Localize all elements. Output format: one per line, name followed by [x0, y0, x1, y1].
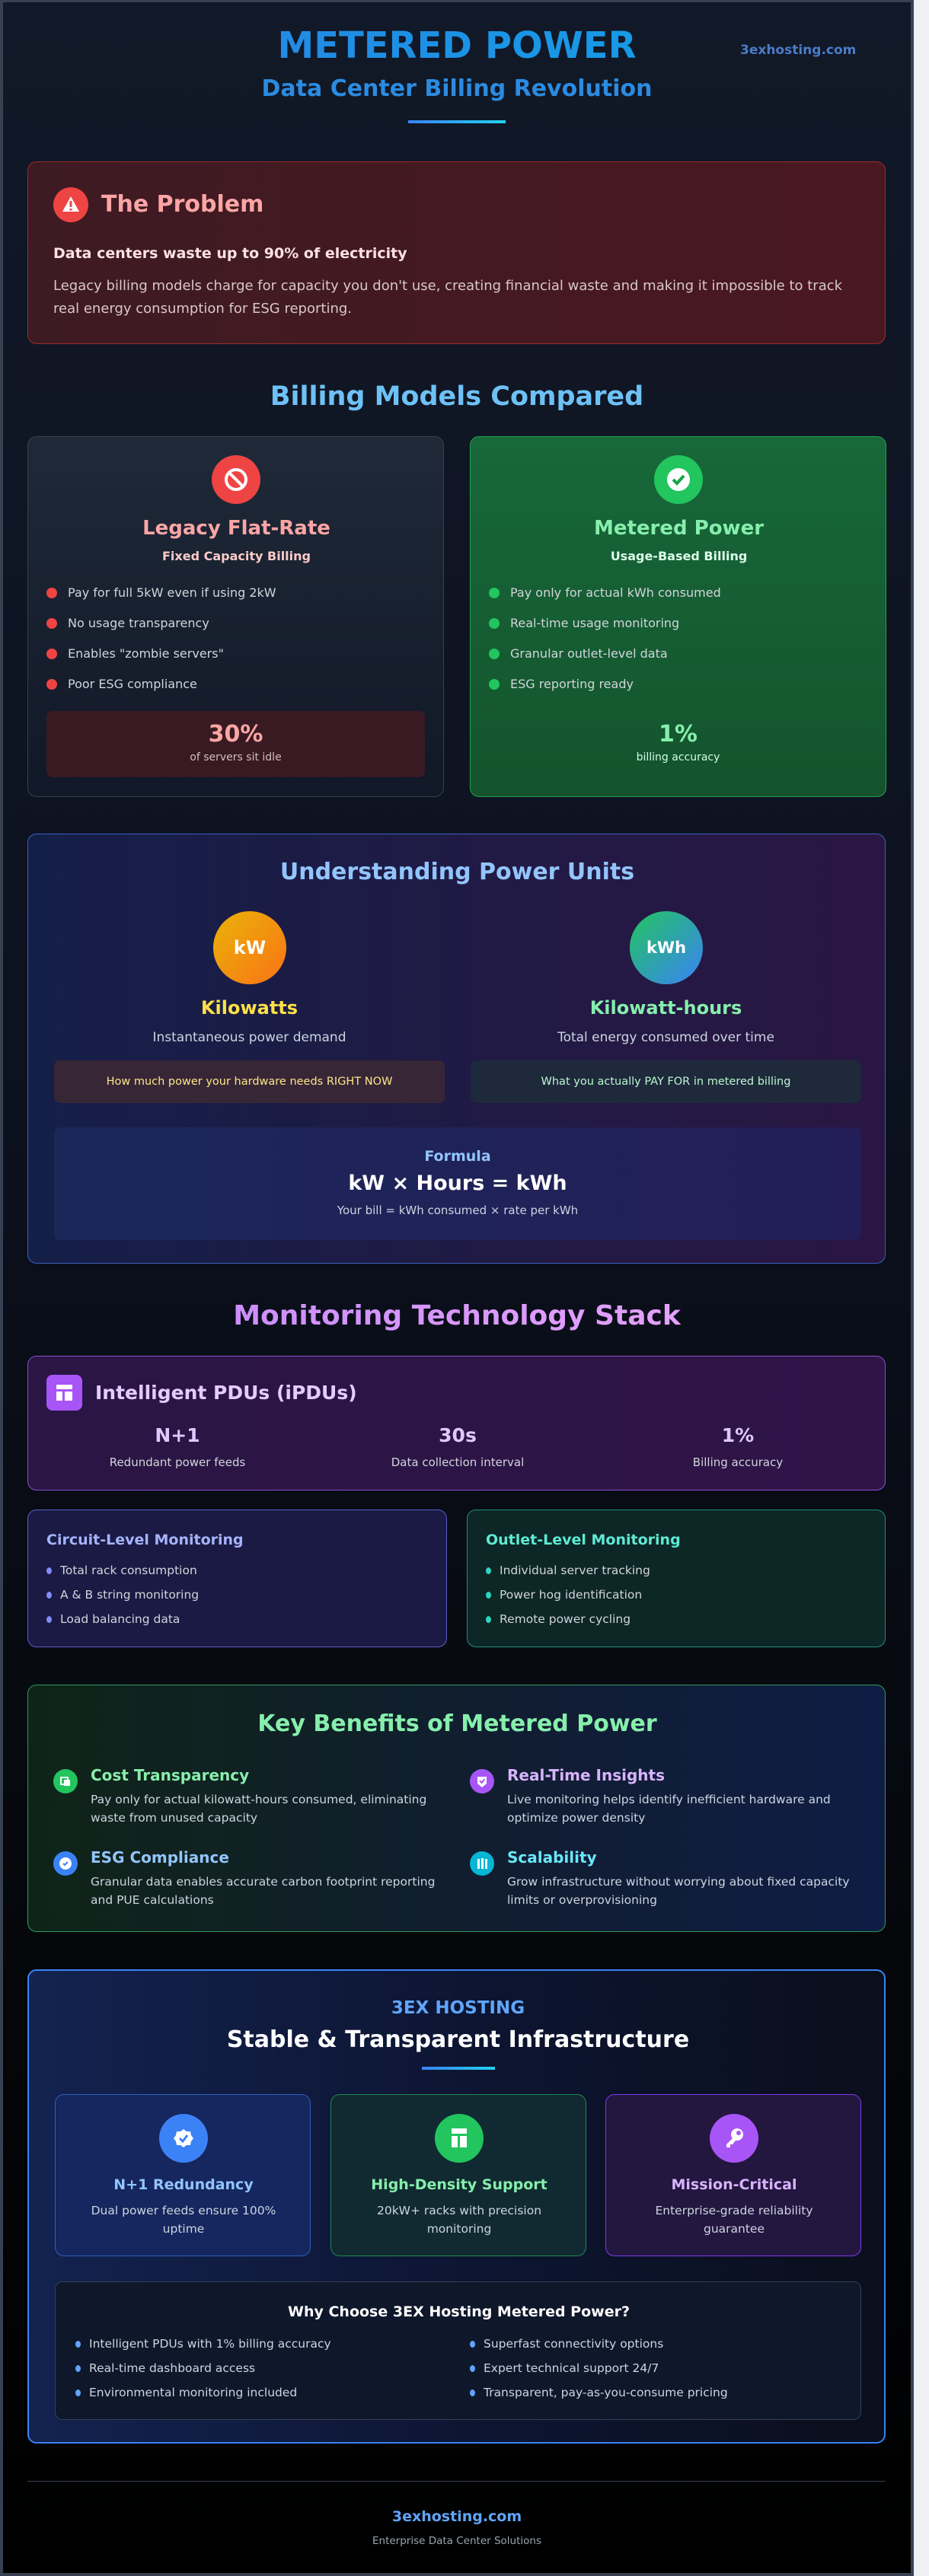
callout: kW — [54, 1060, 445, 1103]
why choose box — [55, 2281, 861, 2420]
card: high-density support: 20kW+ racks with precision monitoring — [377, 2204, 541, 2236]
panel: key benefits — [27, 1685, 886, 1932]
bullet list: Pay only for actual kWh consumed — [510, 585, 721, 600]
callout: kWh: What you actually PAY FOR in metered billing — [541, 1076, 790, 1088]
title: METERED POWER — [277, 24, 637, 67]
footer: 3exhosting.com — [392, 2508, 522, 2525]
benefit: cost transparency — [53, 1766, 426, 1825]
benefit: ESG compliance: Granular data enables accurate carbon footprint reporting and PUE calculations — [91, 1875, 435, 1907]
icon: kWh — [630, 911, 703, 984]
icon: kW: kW — [234, 937, 266, 958]
card: high-density support: High-Density Support — [371, 2176, 548, 2193]
bullet list — [46, 1564, 199, 1626]
stat: 30% — [46, 711, 425, 777]
list: left: Intelligent PDUs with 1% billing accuracy — [89, 2337, 331, 2351]
key stat: Data centers waste up to 90% of electricity — [53, 245, 407, 262]
list: right: Superfast connectivity options — [484, 2337, 663, 2351]
benefit: ESG compliance: ESG Compliance — [91, 1848, 229, 1867]
stat: 30%: 30% — [209, 721, 263, 748]
icon: kWh: kWh — [646, 939, 686, 957]
icon: kW — [213, 911, 286, 984]
bullet list: ESG reporting ready — [510, 677, 634, 691]
stat: N+1: N+1 — [155, 1424, 200, 1446]
formula box: Your bill = kWh consumed × rate per kWh — [337, 1204, 578, 1217]
kilowatts title: Kilowatts — [201, 997, 298, 1019]
panel: outlet-level monitoring: Outlet-Level Monitoring — [486, 1532, 681, 1548]
title underline — [408, 120, 506, 123]
why choose box: Why Choose 3EX Hosting Metered Power? — [288, 2303, 630, 2320]
bullet list: Power hog identification — [500, 1588, 642, 1602]
panel: the problem — [27, 161, 886, 344]
bullet list: A & B string monitoring — [60, 1588, 199, 1602]
icon: warning — [53, 187, 88, 222]
benefit: ESG compliance — [53, 1848, 435, 1907]
panel: circuit-level monitoring: Circuit-Level Monitoring — [46, 1532, 244, 1548]
stat: 30%: of servers sit idle — [190, 751, 282, 764]
formula box: kW × Hours = kWh — [348, 1172, 567, 1195]
panel: intelligent PDUs — [27, 1356, 886, 1490]
card: mission-critical: Mission-Critical — [671, 2176, 797, 2193]
bullet list: Load balancing data — [60, 1612, 180, 1626]
list: right: Expert technical support 24/7 — [484, 2361, 659, 2375]
benefit: scalability: Grow infrastructure without worrying about fixed capacity limits or overprovisioning — [507, 1875, 850, 1907]
panel: outlet-level monitoring — [467, 1510, 886, 1647]
stat: 1%: Billing accuracy — [693, 1455, 783, 1469]
heading: Understanding Power Units — [280, 859, 634, 885]
bullet list: No usage transparency — [68, 616, 209, 630]
kilowatt-hours title: Kilowatt-hours — [590, 997, 742, 1019]
formula box: Formula — [424, 1148, 491, 1165]
benefit: cost transparency: Cost Transparency — [91, 1766, 249, 1784]
benefit: real-time insights: Live monitoring helps identify inefficient hardware and optimize power density — [507, 1793, 831, 1825]
heading: Stable & Transparent Infrastructure — [227, 2026, 689, 2053]
bullet list: Remote power cycling — [500, 1612, 631, 1626]
benefit: cost transparency: Pay only for actual kilowatt-hours consumed, eliminating waste from unused capacity — [91, 1793, 426, 1825]
icon: check — [654, 455, 703, 504]
card: N+1 redundancy: N+1 Redundancy — [113, 2176, 254, 2193]
panel: power units: Instantaneous power demand — [152, 1030, 346, 1045]
card: N+1 redundancy: Dual power feeds ensure 100% uptime — [91, 2204, 276, 2236]
description: Legacy billing models charge for capacity you don't use, creating financial waste and making it impossible to track real energy consumption for ESG reporting. — [53, 278, 842, 317]
panel: metered power — [470, 436, 886, 797]
footer — [372, 2508, 541, 2547]
list: right: Transparent, pay-as-you-consume pricing — [484, 2386, 728, 2399]
heading: monitoring stack: Monitoring Technology Stack — [233, 1300, 681, 1331]
card: N+1 redundancy — [55, 2094, 311, 2256]
list: left — [75, 2337, 331, 2399]
benefit: real-time insights — [470, 1766, 831, 1825]
formula box — [54, 1127, 861, 1240]
panel title: Intelligent PDUs (iPDUs) — [95, 1382, 357, 1404]
panel: metered power: Usage-Based Billing — [611, 549, 747, 563]
stat: 1% — [637, 721, 720, 764]
icon: PDU — [46, 1375, 82, 1411]
card: mission-critical — [605, 2094, 861, 2256]
bullet list: Real-time usage monitoring — [510, 616, 679, 630]
stat: 1%: 1% — [659, 721, 698, 748]
stat: N+1 — [110, 1424, 245, 1469]
footer: Enterprise Data Center Solutions — [372, 2535, 541, 2547]
stat: 30s — [391, 1424, 524, 1469]
bullet list — [489, 585, 721, 691]
card title: Metered Power — [594, 517, 764, 540]
bullet list: Poor ESG compliance — [68, 677, 197, 691]
brand top right: 3exhosting.com — [740, 43, 856, 58]
title — [0, 23, 914, 69]
panel: legacy flat-rate: Fixed Capacity Billing — [162, 549, 311, 563]
stat: 1% — [693, 1424, 783, 1469]
panel: power units: Total energy consumed over time — [557, 1030, 774, 1045]
heading: monitoring stack — [0, 1299, 914, 1334]
benefit: real-time insights: Real-Time Insights — [507, 1766, 665, 1784]
brand label: 3EX HOSTING — [391, 1998, 525, 2018]
panel: power units — [27, 834, 886, 1264]
heading: billing models: Billing Models Compared — [270, 381, 643, 412]
icon: prohibited — [212, 455, 260, 504]
underline — [422, 2067, 495, 2070]
list: right — [470, 2337, 728, 2399]
stat: 1%: billing accuracy — [637, 751, 720, 764]
card: mission-critical: Enterprise-grade reliability guarantee — [655, 2204, 813, 2236]
panel: circuit-level monitoring — [27, 1510, 447, 1647]
bullet list — [46, 585, 276, 691]
panel: legacy flat-rate — [27, 436, 444, 797]
card title: Legacy Flat-Rate — [142, 517, 330, 540]
stat: 1%: 1% — [722, 1424, 754, 1446]
list: left: Real-time dashboard access — [89, 2361, 255, 2375]
benefit: scalability: Scalability — [507, 1848, 597, 1867]
panel: 3EX hosting — [27, 1969, 886, 2444]
stat: N+1: Redundant power feeds — [110, 1455, 245, 1469]
bullet list: Granular outlet-level data — [510, 646, 668, 661]
heading: Key Benefits of Metered Power — [257, 1710, 657, 1737]
bullet list: Individual server tracking — [500, 1564, 650, 1577]
heading: The Problem — [101, 191, 263, 218]
list: left: Environmental monitoring included — [89, 2386, 297, 2399]
bullet list: Enables "zombie servers" — [68, 646, 224, 661]
bullet list: Pay for full 5kW even if using 2kW — [68, 585, 276, 600]
stat: 30s: Data collection interval — [391, 1455, 524, 1469]
benefit: scalability — [470, 1848, 850, 1907]
bullet list: Total rack consumption — [60, 1564, 197, 1577]
stat: 30s: 30s — [439, 1424, 477, 1446]
bullet list — [486, 1564, 650, 1626]
callout: kW: How much power your hardware needs RIGHT NOW — [107, 1076, 392, 1088]
subtitle: Data Center Billing Revolution — [262, 75, 652, 102]
card: high-density support — [330, 2094, 586, 2256]
callout: kWh — [471, 1060, 861, 1103]
